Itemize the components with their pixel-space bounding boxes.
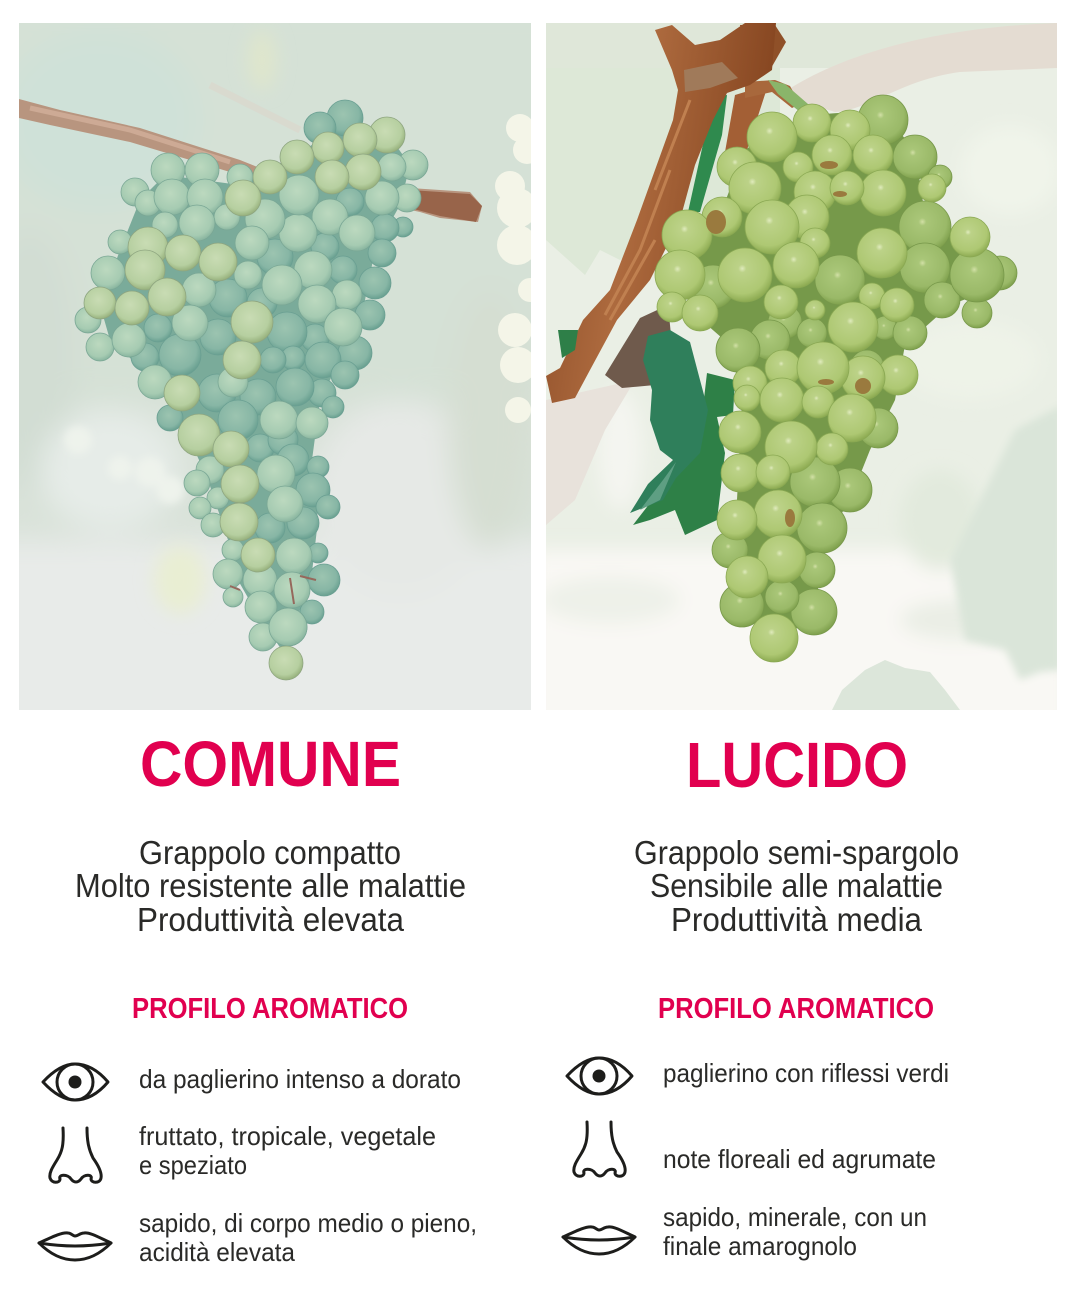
text: Lucido smell: note floreali ed agrumate bbox=[663, 1144, 936, 1174]
text: Lucido sight: paglierino con riflessi verdi bbox=[663, 1058, 949, 1088]
heading: Lucido aromatic profile: PROFILO AROMATICO bbox=[658, 993, 934, 1025]
cluster shadow base bbox=[698, 112, 964, 628]
back cane and stem bbox=[688, 25, 808, 212]
grape cane bbox=[546, 23, 776, 403]
text: Comune taste: acidità elevata bbox=[139, 1237, 295, 1267]
panel: Comune grape photo bbox=[19, 23, 531, 710]
panel: Lucido grape photo bbox=[530, 23, 1070, 730]
text block: Comune characteristics: Molto resistente alle malattie bbox=[75, 867, 466, 904]
grape cluster bbox=[75, 100, 428, 680]
text block: Lucido characteristics bbox=[634, 834, 959, 938]
icon: eye (Comune) bbox=[43, 1064, 108, 1100]
title: Comune: COMUNE bbox=[140, 728, 401, 800]
photo background: faded vineyard bbox=[530, 23, 1070, 730]
text: Lucido taste: sapido, minerale, con un bbox=[663, 1202, 927, 1232]
text block: Lucido characteristics: Grappolo semi-spargolo bbox=[634, 834, 959, 871]
old wood and green leaves bbox=[558, 305, 735, 535]
grape cluster bbox=[655, 95, 1017, 662]
icon: nose (Lucido) bbox=[574, 1122, 625, 1176]
text block: Lucido characteristics: Sensibile alle malattie bbox=[650, 867, 943, 904]
text: Comune smell bbox=[139, 1121, 436, 1180]
grape cane bbox=[19, 99, 482, 222]
photo background: blurred vineyard bbox=[19, 23, 531, 710]
text: Comune sight: da paglierino intenso a dorato bbox=[139, 1064, 461, 1094]
icon: lips (Lucido) bbox=[563, 1227, 635, 1254]
heading: Comune aromatic profile: PROFILO AROMATICO bbox=[132, 993, 408, 1025]
text: Lucido taste bbox=[663, 1202, 927, 1261]
text: Lucido taste: finale amarognolo bbox=[663, 1231, 857, 1261]
text block: Lucido characteristics: Produttività media bbox=[671, 901, 923, 938]
text block: Comune characteristics: Produttività elevata bbox=[137, 901, 405, 938]
title: Lucido: LUCIDO bbox=[686, 729, 908, 801]
text: Comune taste: sapido, di corpo medio o pieno, bbox=[139, 1208, 477, 1238]
text: Comune smell: e speziato bbox=[139, 1150, 247, 1180]
text: Comune taste bbox=[139, 1208, 477, 1267]
icon: eye (Lucido) bbox=[567, 1058, 632, 1094]
text block: Comune characteristics: Grappolo compatto bbox=[139, 834, 401, 871]
icon: nose (Comune) bbox=[50, 1128, 101, 1182]
text: Comune smell: fruttato, tropicale, vegetale bbox=[139, 1121, 436, 1151]
text block: Comune characteristics bbox=[75, 834, 466, 938]
icon: lips (Comune) bbox=[39, 1233, 111, 1260]
cluster shadow base bbox=[100, 120, 410, 655]
